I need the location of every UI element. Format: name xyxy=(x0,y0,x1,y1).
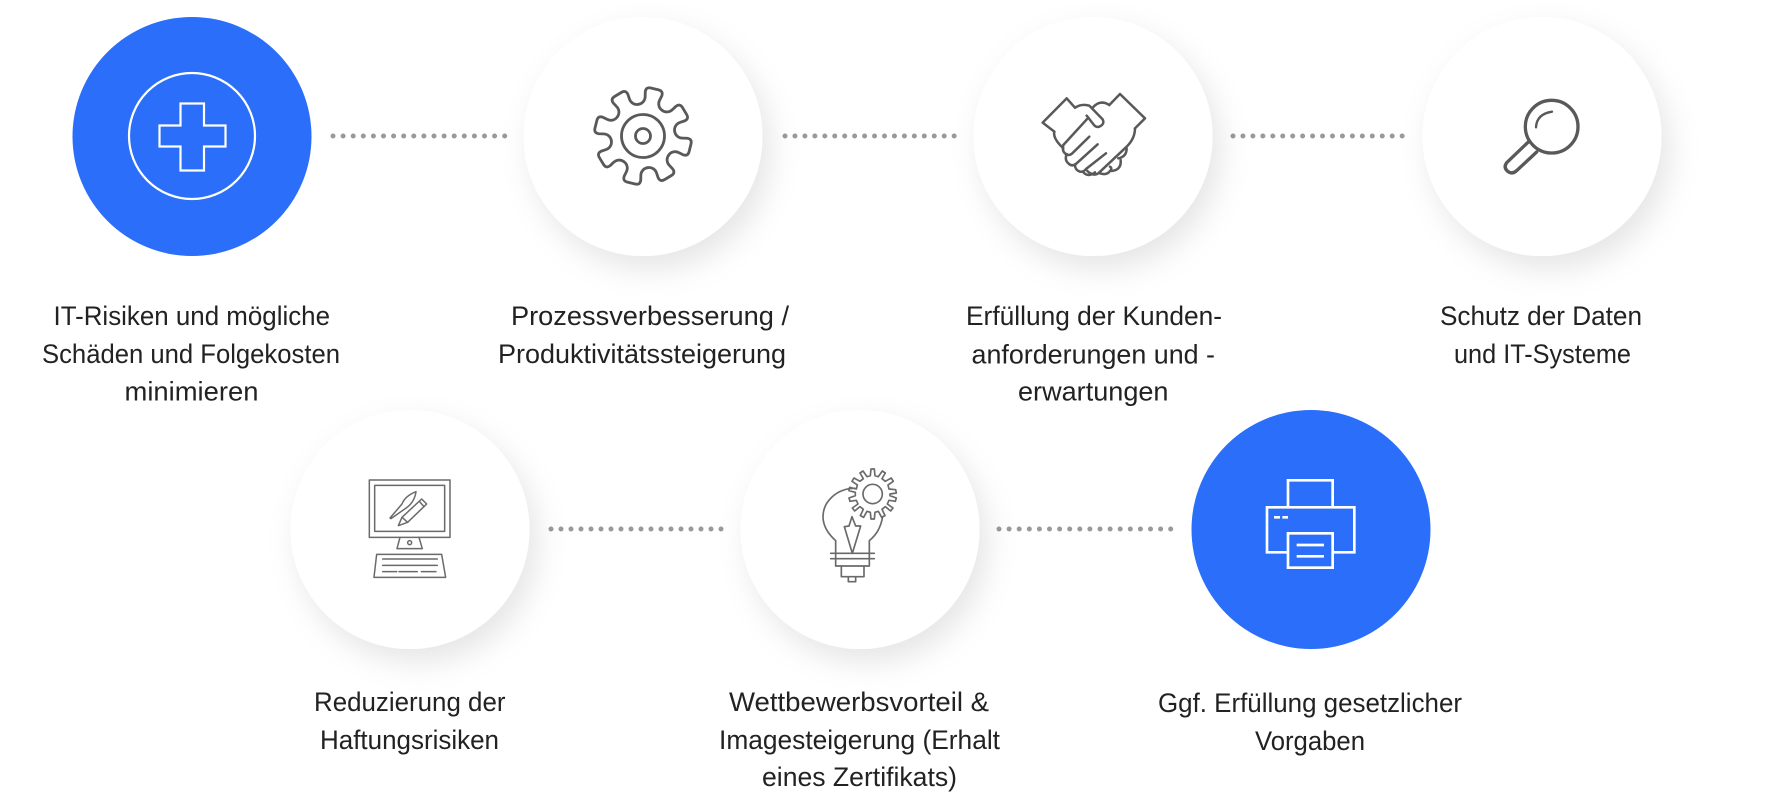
label text: IT-Risiken und mögliche xyxy=(54,301,330,331)
label text: Vorgaben xyxy=(1255,726,1365,756)
label text: Ggf. Erfüllung gesetzlicher xyxy=(1158,688,1462,718)
label text: Imagesteigerung (Erhalt xyxy=(719,725,1000,755)
white circle xyxy=(974,17,1212,256)
label text: Erfüllung der Kunden- xyxy=(966,301,1222,331)
label text: Prozessverbesserung / xyxy=(511,301,789,331)
step 2: Prozessverbesserung xyxy=(498,17,789,369)
label text: minimieren xyxy=(124,376,258,406)
blue circle xyxy=(1192,410,1430,649)
icon: gear xyxy=(593,86,693,186)
label text: Wettbewerbsvorteil & xyxy=(729,687,989,717)
icon: light bulb with gear xyxy=(823,469,896,582)
step 7: gesetzliche Vorgaben xyxy=(1158,410,1462,756)
icon: medical cross in ring xyxy=(129,73,255,199)
label text: erwartungen xyxy=(1018,376,1168,406)
white circle xyxy=(1422,17,1662,256)
blue circle xyxy=(72,17,312,256)
connector dots 3-4 xyxy=(1233,134,1403,138)
label text xyxy=(42,301,340,406)
label text: Haftungsrisiken xyxy=(320,725,499,755)
label text: eines Zertifikats) xyxy=(762,762,957,792)
step 1: IT-Risiken xyxy=(42,17,340,406)
connector dots 2-3 xyxy=(785,134,955,138)
label text xyxy=(966,301,1222,406)
label text xyxy=(719,687,1000,792)
step 5: Haftungsrisiken xyxy=(290,410,530,755)
white circle xyxy=(290,410,530,649)
label text xyxy=(314,687,506,755)
step 6: Wettbewerbsvorteil xyxy=(719,410,1000,792)
label text: und IT-Systeme xyxy=(1454,339,1631,369)
white circle xyxy=(524,17,762,256)
icon: handshake xyxy=(1043,94,1145,175)
label text: Schäden und Folgekosten xyxy=(42,339,340,369)
label text: anforderungen und - xyxy=(972,340,1215,370)
label text: Produktivitätssteigerung xyxy=(498,339,786,369)
connector dots 5-6 xyxy=(551,526,723,532)
label text xyxy=(498,301,789,369)
step 3: Kundenanforderungen xyxy=(966,17,1222,406)
step 4: Schutz der Daten xyxy=(1422,17,1662,369)
icon: computer with pencil and brush xyxy=(369,480,450,577)
icon: magnifying glass xyxy=(1505,100,1578,173)
icon: printer xyxy=(1267,480,1354,568)
label text: Reduzierung der xyxy=(314,687,506,717)
connector dots 6-7 xyxy=(999,526,1172,532)
label text: Schutz der Daten xyxy=(1440,301,1642,331)
label text xyxy=(1158,688,1462,756)
connector dots 1-2 xyxy=(333,134,507,138)
label text xyxy=(1440,301,1642,369)
white circle xyxy=(740,410,980,649)
